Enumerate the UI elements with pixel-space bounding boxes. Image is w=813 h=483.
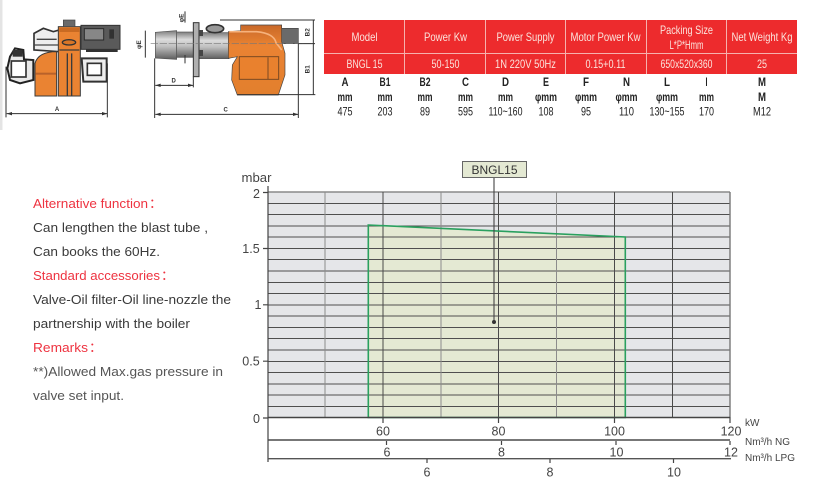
axis labels: 1.5: [242, 242, 260, 256]
dimensions table: 130~155: [650, 104, 685, 118]
heading: remarks: ：: [89, 340, 102, 355]
dimensions table: mm: [338, 90, 352, 104]
dimensions table: mm: [458, 90, 473, 104]
spec table: red header: Model: [352, 30, 378, 44]
valve: [82, 58, 107, 82]
unit labels: kW: [745, 418, 760, 429]
illustration: burner side view: D: [172, 79, 177, 85]
notes text block: **)Allowed Max.gas pressure in: [33, 364, 223, 379]
LPG axis: [268, 458, 731, 460]
illustration: burner front view: A: [55, 107, 60, 113]
axis labels: 60: [376, 424, 390, 438]
upper frame: [34, 28, 59, 52]
heading: alternative function: ：: [149, 196, 162, 211]
dimensions table: φmm: [575, 90, 597, 104]
dimensions table: A: [342, 75, 349, 89]
dimensions table: M: [758, 75, 766, 89]
dimensions table: mm: [699, 90, 714, 104]
axis labels: 6: [424, 466, 431, 480]
dimensions table: B2: [420, 75, 431, 89]
axis labels: 1: [255, 298, 262, 312]
dimensions table: M12: [753, 104, 771, 118]
spec table: red header: 0.15+0.11: [586, 57, 626, 71]
dimensions table: L: [664, 75, 670, 89]
plot background: [268, 192, 730, 418]
axis labels: 2: [253, 187, 260, 201]
dimensions table: E: [543, 75, 549, 89]
illustration: burner front view: [6, 20, 120, 117]
dimensions table: [338, 75, 771, 118]
dimensions table: D: [502, 75, 509, 89]
spec table: red header: 1N 220V 50Hz: [495, 57, 556, 71]
flange: [193, 23, 199, 77]
unit labels: Nm³/h NG: [745, 437, 790, 448]
axis labels: 0.5: [242, 354, 260, 368]
axis labels: [242, 171, 741, 480]
dimensions table: mm: [498, 90, 513, 104]
illustration: burner side view: [136, 11, 315, 118]
dimensions table: 110: [619, 104, 634, 118]
illustration: burner side view: B2: [305, 28, 312, 36]
spec table: red header: [324, 20, 797, 74]
dimension A: [6, 63, 107, 117]
illustration: burner side view: φE: [136, 40, 143, 49]
illustration: burner side view: B1: [305, 65, 312, 73]
kW axis: [268, 416, 730, 418]
spec table: red header: 50-150: [432, 57, 460, 71]
axis labels: 10: [667, 466, 681, 480]
axis labels: 10: [610, 446, 623, 460]
dimensions table: 475: [338, 104, 353, 118]
dimensions table: 89: [420, 104, 430, 118]
spec table: red header: Power Supply: [496, 30, 554, 44]
axis labels: 6: [384, 446, 391, 460]
notes text block: valve set input.: [33, 388, 124, 403]
axis labels: 0: [253, 412, 260, 426]
actuator box: [282, 28, 298, 44]
spec table: red header: Motor Power Kw: [570, 30, 641, 44]
illustration: burner side view: φE: [178, 14, 185, 22]
spec table: red header: L*P*Hmm: [670, 38, 704, 52]
dimensions table: F: [583, 75, 589, 89]
left edge strip: [0, 0, 2, 130]
axis labels: mbar: [242, 171, 272, 185]
centre line: [151, 43, 312, 45]
dimensions table: φmm: [535, 90, 557, 104]
dimensions table: φmm: [616, 90, 638, 104]
spec table: red header: Packing Size: [660, 23, 713, 37]
dimensions table: 95: [581, 104, 591, 118]
y ticks: [263, 192, 268, 418]
dimension lines: [145, 11, 315, 118]
top cap: [63, 20, 75, 27]
top fitting: [206, 25, 224, 33]
chart: gas pressure vs output: [242, 162, 795, 480]
control box: [81, 25, 120, 49]
orange housing: [35, 52, 57, 96]
spec table: red header: Power Kw: [424, 30, 467, 44]
notes text block: Valve-Oil filter-Oil line-nozzle the: [33, 292, 231, 307]
notes text block: Can books the 60Hz.: [33, 244, 160, 259]
dimensions table: B1: [380, 75, 391, 89]
heading: standard accessories: ：: [161, 268, 174, 283]
dimensions table: C: [462, 75, 469, 89]
working area fill: [368, 225, 625, 418]
heading: remarks: Remarks: [33, 340, 88, 355]
horizontal grid: [268, 204, 730, 406]
dimensions table: 110~160: [488, 104, 523, 118]
notes text block: Can lengthen the blast tube ,: [33, 220, 208, 235]
heading: alternative function: Alternative function: [33, 196, 148, 211]
NG axis: [268, 439, 730, 441]
spec table: red header: 25: [757, 57, 767, 71]
spec table: red header: 650x520x360: [660, 57, 713, 71]
burner motor: [7, 48, 33, 83]
dimensions table: M: [758, 90, 766, 104]
spec table: red header: BNGL 15: [346, 57, 383, 71]
blast tube: [155, 31, 177, 59]
dimensions table: 108: [538, 104, 554, 118]
y axis: [267, 186, 269, 462]
axis labels: 80: [492, 424, 505, 438]
spec table: red header: Net Weight Kg: [732, 30, 792, 44]
dimensions table: I: [706, 75, 708, 89]
vertical grid: [325, 192, 556, 417]
axis labels: 8: [547, 466, 554, 480]
dimensions table: φmm: [656, 90, 678, 104]
BNGL15 callout: BNGL15: [471, 163, 518, 177]
dimensions table: mm: [418, 90, 432, 104]
orange body: [228, 25, 285, 95]
notes text block: [33, 196, 231, 403]
BNGL15 callout: [462, 162, 526, 324]
dimensions table: 170: [699, 104, 714, 118]
axis labels: 12: [724, 446, 738, 460]
dimensions table: mm: [378, 90, 392, 104]
illustration: burner side view: C: [224, 107, 229, 113]
working area outline: [368, 225, 625, 418]
dimensions table: N: [623, 75, 630, 89]
axis labels: 100: [604, 424, 625, 438]
unit labels: Nm³/h LPG: [745, 453, 795, 464]
heading: standard accessories: Standard accessories: [33, 268, 160, 283]
axis labels: 8: [498, 446, 505, 460]
orange column: [58, 27, 80, 96]
unit labels: [745, 418, 795, 464]
dimensions table: 203: [378, 104, 393, 118]
axis labels: 120: [721, 424, 741, 438]
dimensions table: 595: [458, 104, 473, 118]
notes text block: partnership with the boiler: [33, 316, 191, 331]
